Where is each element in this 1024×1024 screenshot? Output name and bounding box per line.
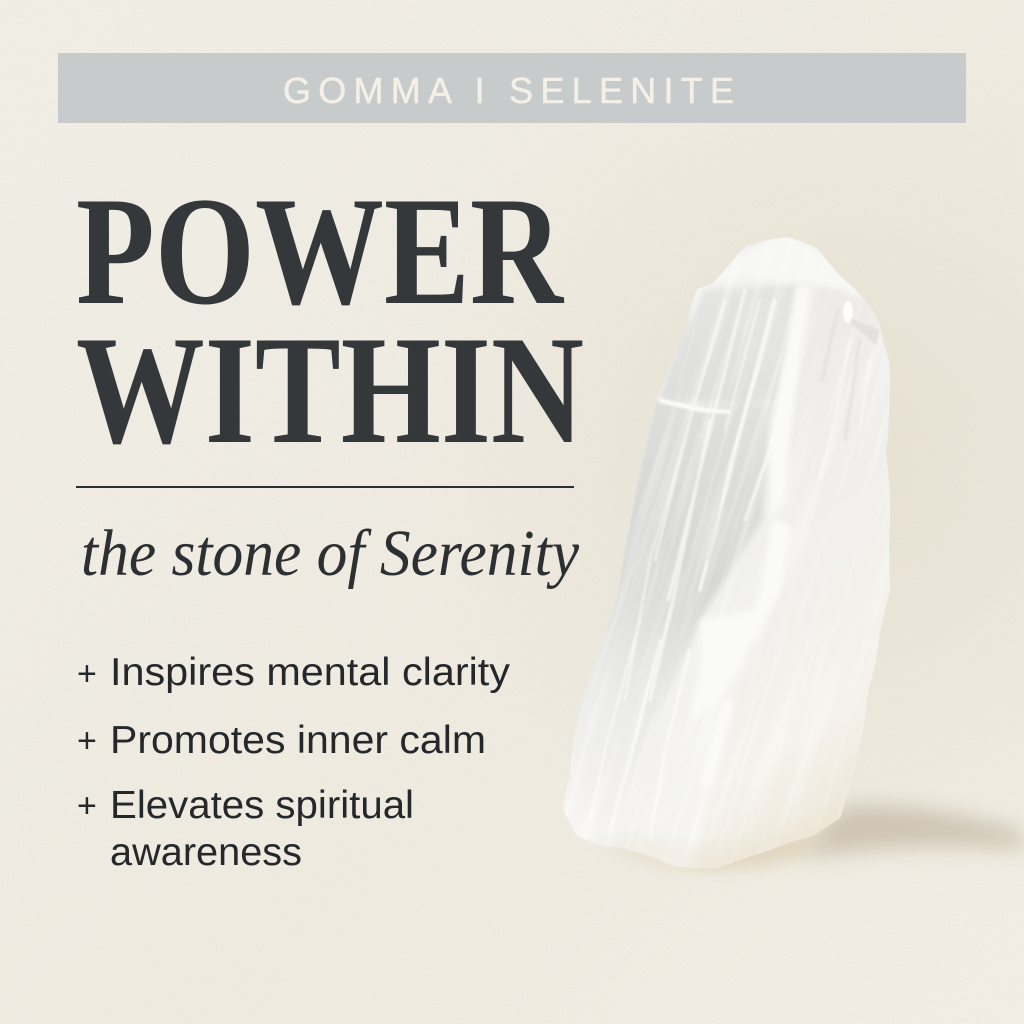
benefit: inner calm: Promotes inner calm — [110, 719, 486, 762]
benefit: spiritual awareness: Elevates spiritual — [110, 784, 414, 827]
grey striation lines — [692, 310, 860, 560]
shaded right face — [698, 763, 852, 868]
top right chip — [843, 301, 880, 345]
divider rule — [76, 486, 574, 488]
top cap — [720, 261, 859, 294]
title: POWER — [76, 165, 565, 337]
white fractured ridge — [701, 286, 811, 766]
header band — [58, 53, 966, 123]
benefit: spiritual awareness — [77, 784, 414, 874]
horizontal ledge — [658, 398, 730, 414]
shaded striated front face — [603, 287, 794, 714]
crystal body — [563, 237, 890, 868]
benefit: mental clarity: Inspires mental clarity — [110, 651, 511, 694]
selenite crystal with cast shadow — [563, 237, 1024, 874]
striation lines — [609, 289, 777, 786]
subtitle: the stone of Serenity — [81, 517, 580, 590]
cast shadow — [600, 805, 1024, 870]
benefit: inner calm: + — [77, 722, 97, 760]
fibrous streak texture — [628, 294, 808, 806]
header band: GOMMA I SELENITE — [283, 70, 734, 111]
benefit: spiritual awareness: + — [77, 787, 97, 825]
title: WITHIN — [76, 304, 584, 476]
warm base shading — [600, 838, 762, 868]
benefit: spiritual awareness: awareness — [110, 831, 302, 874]
benefits list — [77, 651, 511, 874]
benefit: mental clarity: + — [77, 655, 97, 693]
title — [76, 165, 584, 476]
